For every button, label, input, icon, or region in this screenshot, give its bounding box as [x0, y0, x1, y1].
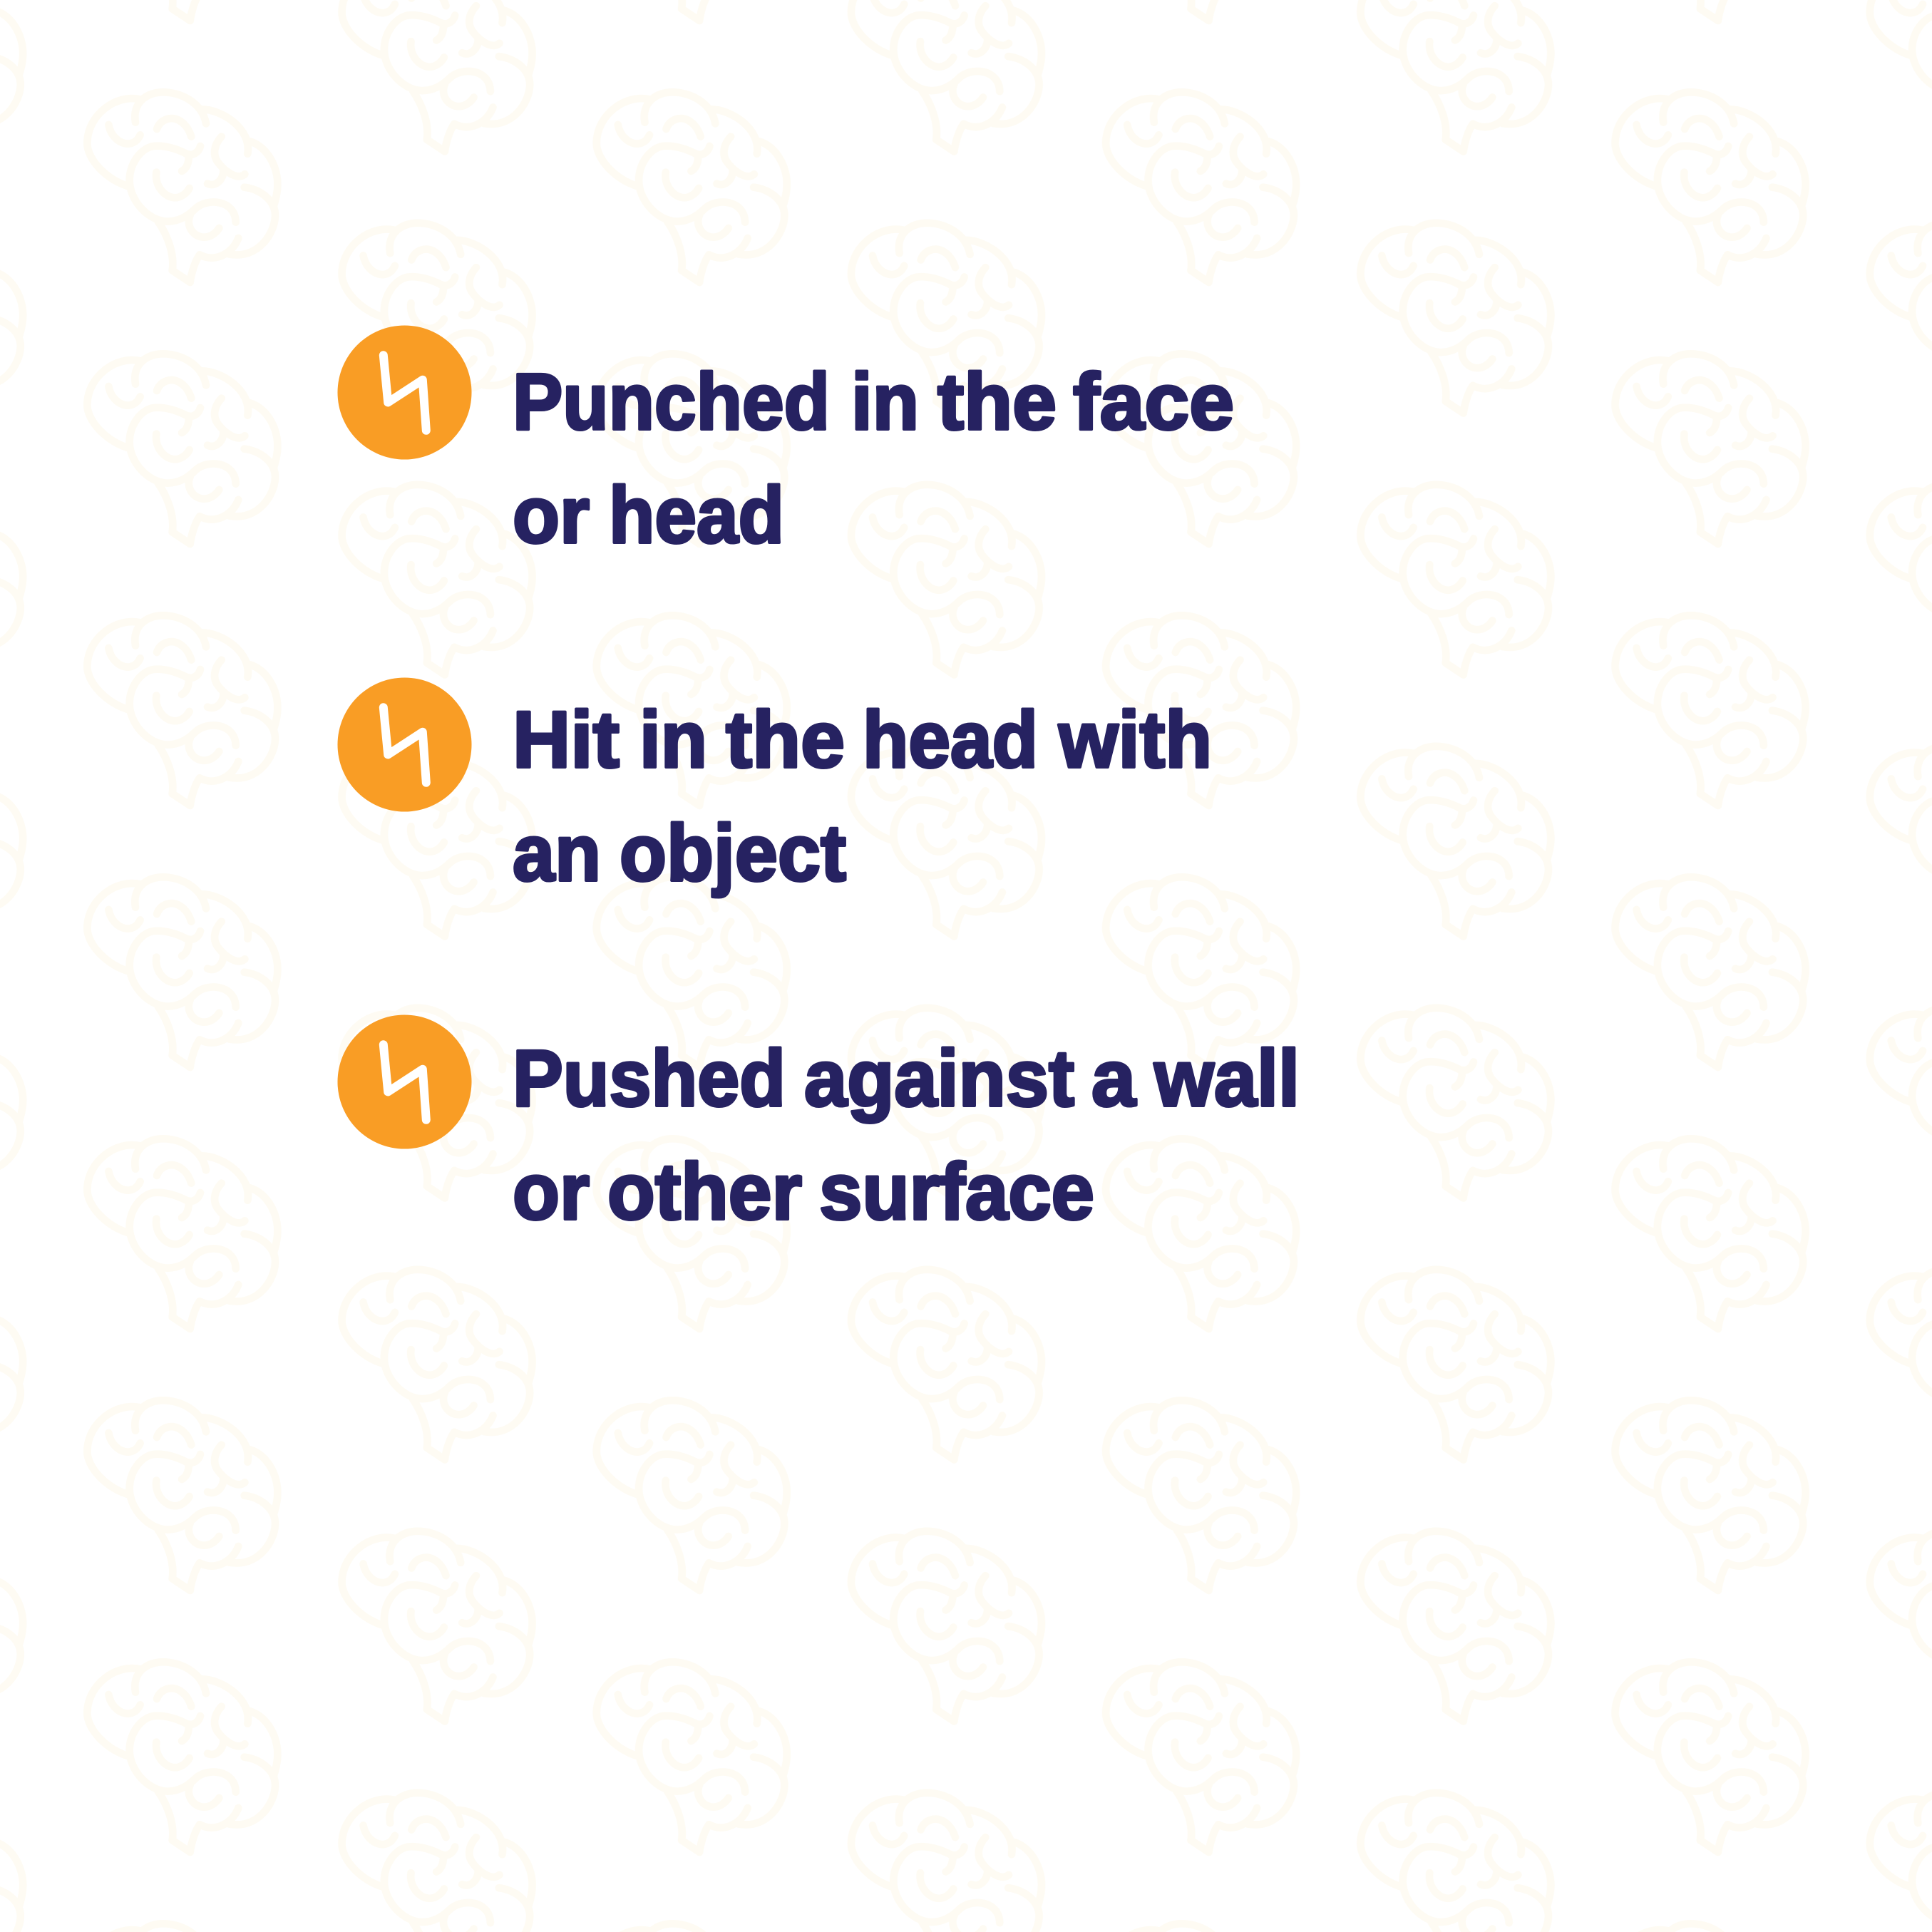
icon: lightning bolt in orange circle [338, 1015, 472, 1149]
text: Pushed against a wall or other surface: or [513, 1147, 590, 1236]
text: Pushed against a wall or other surface: against [804, 1034, 1074, 1123]
text: Pushed against a wall or other surface: a [1091, 1034, 1136, 1123]
list item 3: pushed against a wall or other surface [338, 1015, 1300, 1236]
text: Pushed against a wall or other surface: other [607, 1147, 802, 1236]
icon: lightning bolt in orange circle [338, 325, 472, 459]
text: Punched in the face or head [513, 357, 1234, 560]
text: Pushed against a wall or other surface: surface [819, 1147, 1094, 1236]
text: Punched in the face or head: face [1073, 357, 1234, 446]
text: Hit in the head with an object: head [863, 695, 1038, 784]
text: Hit in the head with an object: in [639, 695, 707, 784]
text: Punched in the face or head: or [513, 471, 590, 560]
text: Punched in the face or head: in [851, 357, 919, 446]
text: Pushed against a wall or other surface: Pushed [513, 1034, 786, 1123]
text: Punched in the face or head: head [609, 471, 784, 560]
list item 1: punched in the face or head [338, 325, 1234, 560]
text: Hit in the head with an object: an [513, 808, 601, 898]
text: Punched in the face or head: Punched [513, 357, 830, 446]
text: Punched in the face or head: the [937, 357, 1057, 446]
text: Hit in the head with an object: with [1058, 695, 1212, 784]
list item 2: hit in the head with an object [338, 677, 1212, 898]
text: Pushed against a wall or other surface: wall [1153, 1034, 1300, 1123]
text: Pushed against a wall or other surface [513, 1034, 1300, 1236]
text: Hit in the head with an object [513, 695, 1212, 898]
text: Hit in the head with an object: the [726, 695, 845, 784]
text: Hit in the head with an object: Hit [513, 695, 620, 784]
icon: lightning bolt in orange circle [338, 677, 472, 811]
text: Hit in the head with an object: object [620, 808, 846, 898]
